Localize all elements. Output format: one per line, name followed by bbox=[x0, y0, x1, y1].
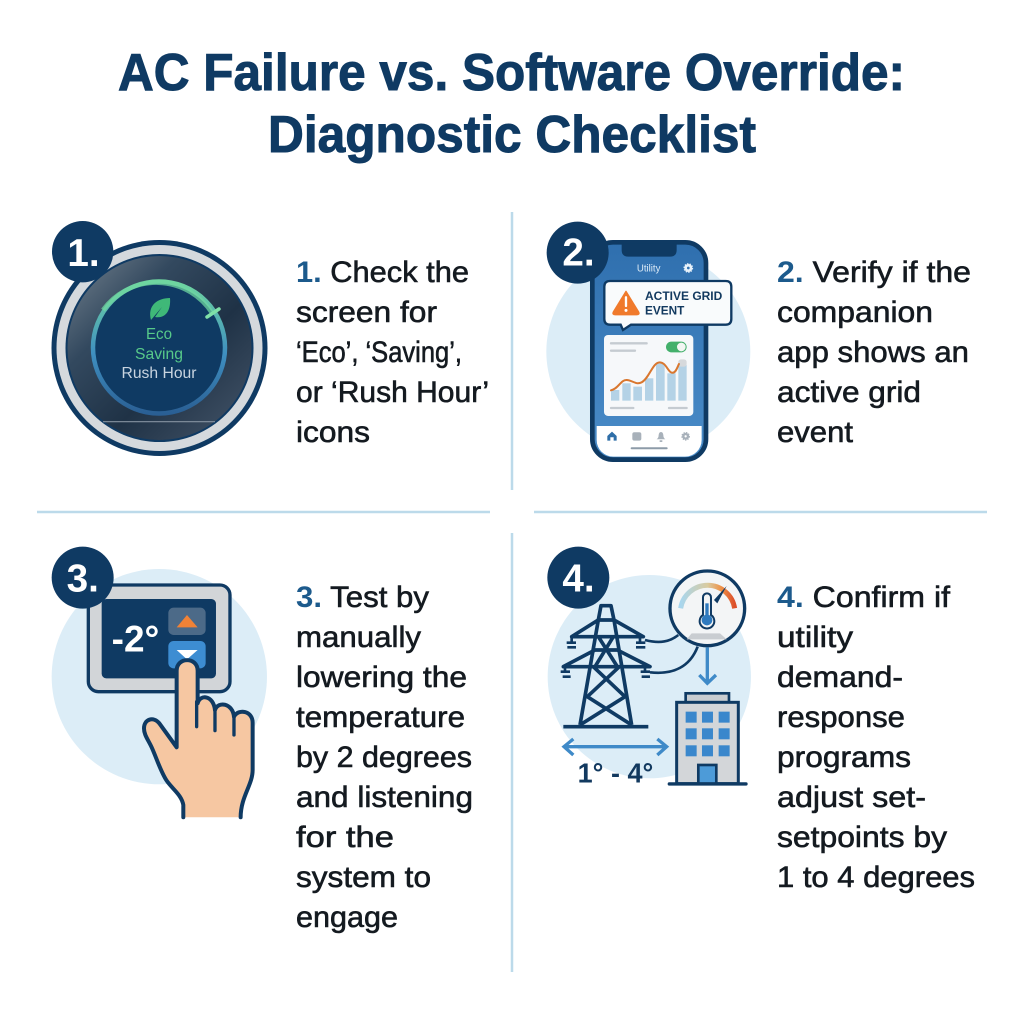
title: Diagnostic Checklist bbox=[268, 106, 756, 164]
text: step 2: active grid bbox=[777, 376, 921, 409]
callout: active grid event: ACTIVE GRID bbox=[645, 290, 722, 303]
panel: step 2 bbox=[546, 222, 971, 460]
text: step 1: icons bbox=[296, 416, 370, 449]
badge 3: 3. bbox=[67, 557, 99, 600]
icon: gauge bbox=[670, 571, 745, 646]
text: step 1: ‘Eco’, ‘Saving’, bbox=[296, 336, 462, 369]
text: step 3: 3. Test by bbox=[296, 581, 429, 614]
title: AC Failure vs. Software Override: bbox=[118, 44, 905, 102]
text: step 3: lowering the bbox=[296, 661, 467, 694]
badge 1: 1. bbox=[67, 232, 100, 275]
text: step 2: 2. Verify if the bbox=[777, 256, 971, 289]
dial labels: Rush Hour bbox=[122, 365, 197, 382]
text: step 3: temperature bbox=[296, 701, 465, 734]
text: step 3: system to bbox=[296, 861, 431, 894]
icon: thermostat and hand: -2° bbox=[112, 619, 159, 660]
text: step 4: response bbox=[777, 701, 905, 734]
title bbox=[118, 44, 905, 164]
text: step 2 bbox=[777, 256, 971, 449]
dial labels: Saving bbox=[135, 346, 183, 363]
text: step 1 bbox=[296, 256, 489, 449]
text: step 2: companion bbox=[777, 296, 933, 329]
icon: grid tower, gauge and building bbox=[548, 571, 751, 789]
dial labels: Eco bbox=[146, 326, 172, 343]
icon: phone app: Utility bbox=[637, 264, 661, 275]
badge 3 bbox=[52, 547, 114, 609]
icon: pylon bbox=[561, 606, 698, 727]
badge 1 bbox=[52, 221, 113, 282]
text: step 4 bbox=[777, 581, 975, 894]
text: step 4: utility bbox=[777, 621, 853, 654]
icon: building bbox=[669, 693, 746, 784]
text: step 4: programs bbox=[777, 741, 911, 774]
text: step 3: engage bbox=[296, 901, 398, 934]
text: step 4: 4. Confirm if bbox=[777, 581, 951, 614]
icon: gear bbox=[684, 264, 692, 272]
text: step 4: setpoints by bbox=[777, 821, 947, 854]
icon: thermostat dial bbox=[52, 240, 268, 456]
icon: leaf bbox=[150, 298, 170, 320]
arrow: 1 to 4 degree range bbox=[564, 739, 667, 755]
badge 2 bbox=[547, 222, 609, 284]
text: step 3: manually bbox=[296, 621, 421, 654]
badge 2: 2. bbox=[562, 232, 595, 275]
card chart bbox=[604, 335, 693, 416]
panel: step 3 bbox=[52, 547, 473, 934]
arrow: gauge to building bbox=[699, 647, 716, 683]
callout: active grid event: EVENT bbox=[645, 304, 684, 317]
text: step 3 bbox=[296, 581, 473, 934]
badge 4: 4. bbox=[562, 557, 595, 600]
nav bar icons bbox=[607, 432, 689, 448]
dial labels bbox=[122, 326, 197, 382]
text: step 1: 1. Check the bbox=[296, 256, 469, 289]
panel: step 1 bbox=[52, 221, 489, 456]
text: step 3: by 2 degrees bbox=[296, 741, 472, 774]
text: step 3: for the bbox=[296, 821, 394, 854]
text: step 4: 1 to 4 degrees bbox=[777, 861, 975, 894]
icon: phone app bbox=[546, 242, 750, 460]
text: step 1: screen for bbox=[296, 296, 437, 329]
callout: active grid event bbox=[604, 281, 731, 330]
icon: hand bbox=[144, 660, 253, 817]
text: step 3: and listening bbox=[296, 781, 473, 814]
text: step 2: app shows an bbox=[777, 336, 969, 369]
icon: thermostat and hand bbox=[52, 569, 267, 817]
badge 4 bbox=[547, 547, 609, 609]
panel: step 4 bbox=[547, 547, 975, 894]
text: step 4: demand- bbox=[777, 661, 903, 694]
text: step 4: adjust set- bbox=[777, 781, 926, 814]
label: degree range: 1° - 4° bbox=[578, 758, 653, 789]
text: step 2: event bbox=[777, 416, 854, 449]
text: step 1: or ‘Rush Hour’ bbox=[296, 376, 489, 409]
